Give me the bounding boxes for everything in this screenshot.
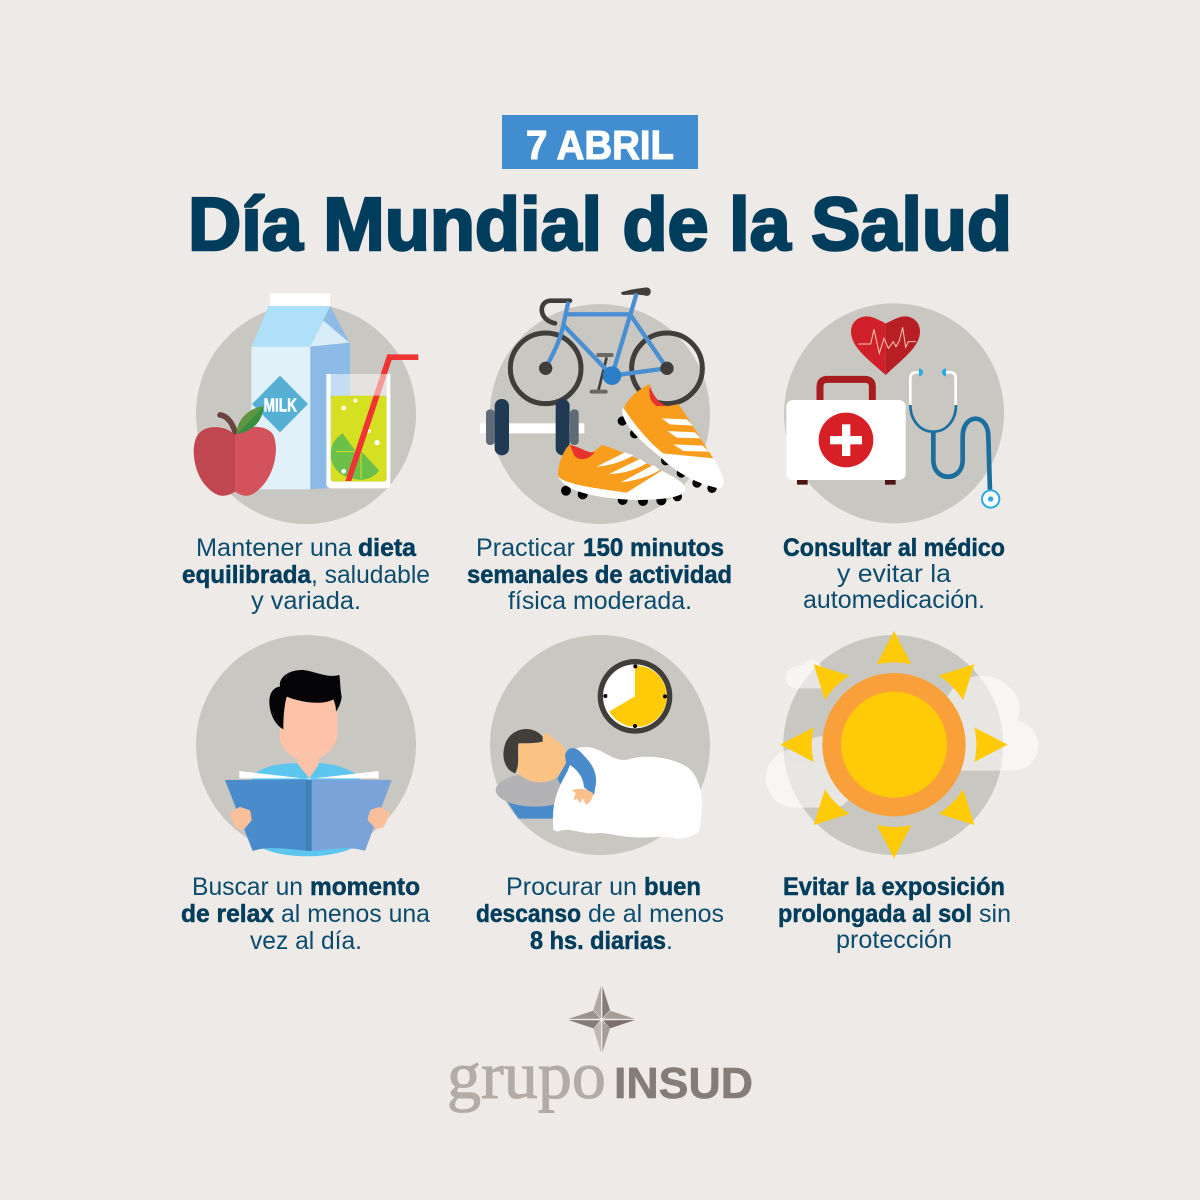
caption: activity bbox=[467, 534, 732, 615]
caption: diet: Mantener una bbox=[196, 534, 352, 562]
caption: activity: Practicar bbox=[476, 534, 575, 562]
caption: rest: Procurar un bbox=[506, 873, 637, 901]
caption: sun: protección bbox=[836, 926, 952, 954]
panel: relax bbox=[181, 635, 430, 955]
panel: healthy diet bbox=[182, 293, 430, 615]
icon: compass star bbox=[568, 986, 635, 1053]
caption: rest: descanso bbox=[476, 900, 581, 928]
icon: food and drink bbox=[194, 293, 418, 524]
caption: diet: dieta bbox=[358, 534, 417, 562]
caption: rest: 8 hs. diarias bbox=[530, 927, 666, 955]
icon: medical kit, heart and stethoscope bbox=[784, 303, 1004, 523]
caption: sun: Evitar la exposición bbox=[783, 873, 1005, 901]
caption: doctor: automedicación. bbox=[803, 586, 985, 614]
icon: sun and clouds bbox=[766, 631, 1038, 858]
caption: diet: equilibrada bbox=[182, 561, 312, 589]
caption: sun: sin bbox=[979, 900, 1011, 928]
caption: rest bbox=[476, 873, 724, 955]
date badge: 7 ABRIL bbox=[526, 122, 674, 168]
logo: grupo INSUD: INSUD bbox=[614, 1059, 753, 1108]
icon: bicycle, dumbbell and shoes bbox=[480, 287, 724, 524]
caption: activity: 150 minutos bbox=[583, 534, 724, 562]
caption: diet: y variada. bbox=[251, 587, 361, 615]
title: Día Mundial de la Salud bbox=[188, 182, 1012, 266]
panel: consult doctor bbox=[783, 303, 1005, 614]
caption: relax: vez al día. bbox=[250, 927, 362, 955]
logo: grupo INSUD: grupo bbox=[447, 1037, 606, 1113]
caption: rest: de al menos bbox=[588, 900, 724, 928]
icon: sleeping person and clock bbox=[490, 635, 710, 855]
caption: doctor bbox=[783, 534, 1005, 614]
caption: activity: semanales de actividad bbox=[467, 561, 732, 589]
caption: rest: buen bbox=[644, 873, 701, 901]
caption: activity: física moderada. bbox=[508, 587, 692, 615]
logo: grupo INSUD bbox=[447, 986, 753, 1113]
caption: doctor: y evitar la bbox=[837, 560, 951, 588]
caption: sun bbox=[778, 873, 1011, 954]
caption: relax: al menos una bbox=[281, 900, 430, 928]
caption: diet bbox=[182, 534, 430, 615]
caption: doctor: Consultar al médico bbox=[783, 534, 1005, 562]
icon: food and drink: MILK bbox=[264, 395, 297, 416]
caption: sun: prolongada al sol bbox=[778, 900, 972, 928]
caption: rest: . bbox=[666, 927, 673, 955]
date badge bbox=[502, 115, 698, 169]
panel: physical activity bbox=[467, 287, 732, 615]
caption: relax: Buscar un bbox=[192, 873, 303, 901]
icon: person reading a book bbox=[196, 635, 416, 856]
caption: relax: de relax bbox=[181, 900, 274, 928]
caption: relax: momento bbox=[310, 873, 420, 901]
panel: sun protection bbox=[766, 631, 1038, 954]
caption: diet: , saludable bbox=[311, 561, 430, 589]
caption: relax bbox=[181, 873, 430, 955]
panel: rest bbox=[476, 635, 724, 955]
